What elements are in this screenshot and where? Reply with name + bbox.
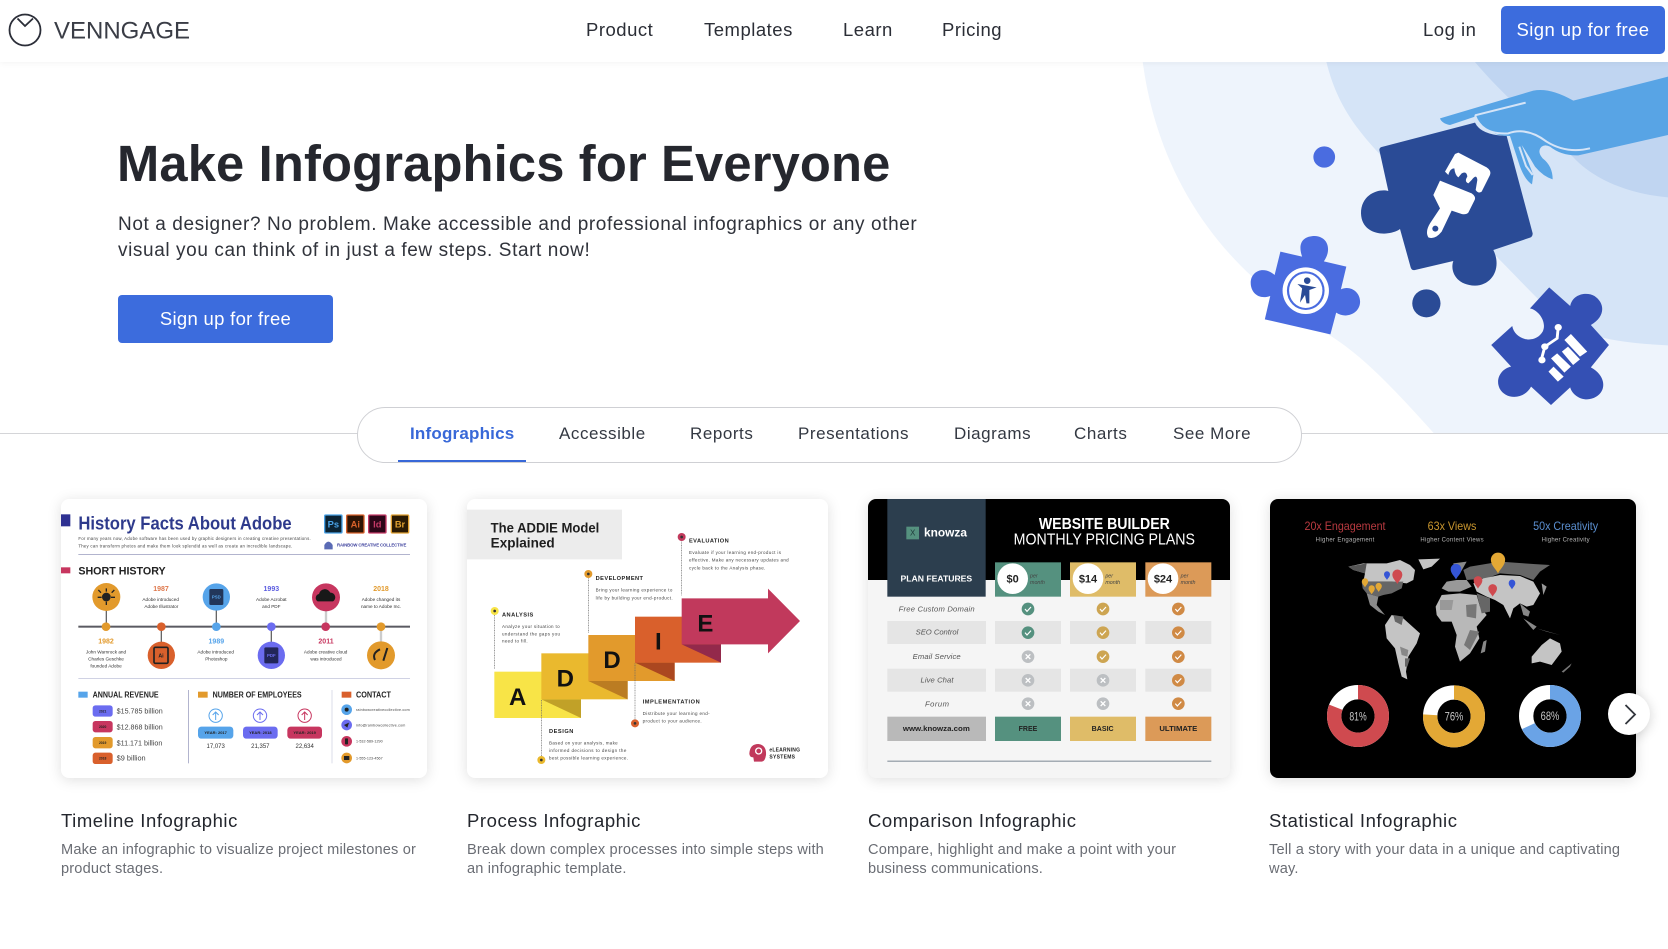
timeline labels: John Warnrock and — [86, 649, 127, 654]
price tags: month — [1030, 580, 1045, 586]
price tags: per — [1029, 574, 1038, 580]
nav link: Templates: Templates — [704, 19, 793, 40]
app icons: Id — [373, 520, 382, 530]
number of employees: 21,357 — [251, 744, 270, 750]
app icons: Ai — [351, 520, 360, 530]
timeline labels: 1989 — [209, 639, 224, 646]
plan footer — [887, 717, 1211, 741]
pricing title — [1014, 516, 1195, 548]
pricing title: WEBSITE BUILDER — [1039, 516, 1170, 533]
app icons: Ps — [328, 520, 339, 530]
tab: Charts: Charts — [1074, 424, 1127, 443]
description: comparison: Compare, highlight and make a point with your — [868, 842, 1176, 858]
tab bar — [357, 407, 1302, 463]
step: analysis: ANALYSIS — [502, 613, 534, 619]
timeline labels: Adobe Acrobat — [256, 597, 287, 602]
carousel next arrow — [1608, 693, 1650, 735]
world map — [1348, 559, 1572, 679]
timeline labels: Adobe introduced — [142, 597, 179, 602]
description: comparison — [868, 842, 1176, 877]
plan footer: FREE — [1019, 724, 1037, 733]
step: evaluation: effective. Make any necessary updates and — [689, 558, 789, 563]
nav link: Pricing: Pricing — [942, 19, 1002, 40]
title box: The ADDIE Model — [491, 520, 599, 535]
annual revenue: ANNUAL REVENUE — [93, 690, 159, 699]
price tags: per — [1104, 574, 1113, 580]
timeline labels — [86, 586, 401, 668]
timeline labels: Adobe creative cloud — [304, 649, 348, 654]
donut chart: 68%: 68% — [1541, 710, 1559, 723]
step: analysis — [491, 607, 560, 669]
icon: hand placing paint brush puzzle piece — [1361, 76, 1668, 286]
description: timeline: product stages. — [61, 861, 163, 877]
step: design: Based on your analysis, make — [549, 740, 618, 745]
step: evaluation: EVALUATION — [689, 539, 729, 545]
step: implementation: product to your audience. — [643, 719, 702, 724]
donut chart: 81% — [1334, 692, 1382, 740]
annual revenue: $9 billion — [117, 754, 146, 763]
hero description: visual you can think of in just a few steps. Start now! — [118, 240, 590, 261]
elearning systems logo: SYSTEMS — [769, 755, 796, 761]
icon: accessibility puzzle piece — [1251, 236, 1360, 334]
number of employees: NUMBER OF EMPLOYEES — [213, 690, 302, 699]
number of employees: 17,073 — [206, 744, 226, 750]
card: statistical infographic thumbnail — [1270, 499, 1636, 778]
timeline: Ai — [158, 654, 164, 660]
timeline labels: 1982 — [98, 639, 114, 646]
feature names: Free Custom Domain — [899, 605, 975, 614]
feature names: Email Service — [913, 652, 961, 661]
step: analysis: Analyze your situation to — [502, 624, 560, 629]
timeline labels: 2011 — [318, 639, 334, 646]
description: timeline: Make an infographic to visualize project milestones or — [61, 842, 416, 858]
icon: blue dot — [1313, 146, 1335, 168]
step: development — [584, 570, 673, 633]
contact — [341, 690, 410, 763]
nav button: sign up — [1501, 6, 1665, 54]
card: comparison infographic thumbnail — [868, 499, 1230, 778]
hero description: Not a designer? No problem. Make accessible and professional infographics or any other — [118, 214, 917, 235]
price tags — [995, 562, 1211, 597]
price tags: month — [1181, 580, 1196, 586]
icon: venngage clock mark — [8, 14, 42, 46]
icon: chevron right — [1624, 704, 1636, 725]
timeline: PDF — [267, 653, 276, 658]
plan footer: BASIC — [1092, 724, 1114, 733]
contact: 1-532-589-1290 — [356, 740, 383, 744]
adobe intro: They can transform photos and make them look splendid as well as create an incredible landscape. — [78, 543, 292, 548]
plan footer: www.knowza.com — [902, 724, 970, 733]
icon: hand — [1440, 77, 1668, 184]
description: statistical: Tell a story with your data in a unique and captivating — [1269, 842, 1620, 858]
donut chart: 81%: 81% — [1349, 711, 1367, 724]
hero description — [118, 214, 917, 261]
app icons — [325, 515, 409, 533]
nav link: Learn: Learn — [843, 19, 893, 40]
timeline labels: 1987 — [153, 586, 169, 593]
description: process: Break down complex processes into simple steps with — [467, 842, 824, 858]
timeline: PSD — [212, 595, 221, 600]
contact: CONTACT — [356, 690, 391, 699]
donut chart: 76% — [1430, 692, 1478, 740]
pricing title: MONTHLY PRICING PLANS — [1014, 531, 1195, 548]
title box — [467, 510, 622, 559]
check and cross marks — [1022, 603, 1185, 710]
step: design: best possible learning experience. — [549, 756, 628, 761]
addie staircase arrow: I — [655, 628, 662, 655]
step: analysis: need to fill. — [502, 639, 528, 644]
price tags: $14 — [1079, 574, 1098, 586]
price tags: $24 — [1154, 574, 1173, 586]
step: implementation: IMPLEMENTATION — [643, 700, 700, 706]
features header: X — [910, 529, 916, 538]
step: implementation: Distribute your learning end- — [643, 711, 710, 716]
number of employees — [198, 690, 322, 750]
nav link: Product: Product — [586, 19, 653, 40]
step: analysis: understand the gaps you — [502, 631, 560, 636]
stat headings: Higher Creativity — [1542, 537, 1590, 543]
hero background and small puzzle illustration — [1143, 62, 1668, 433]
stat headings — [1304, 519, 1598, 543]
addie staircase arrow: A — [509, 684, 526, 711]
logo — [8, 14, 190, 46]
timeline labels: Adobe changed its — [362, 597, 401, 602]
caption: comparison: Comparison Infographic — [868, 810, 1077, 831]
tab: Accessible: Accessible — [559, 424, 646, 443]
nav link: Log in: Log in — [1423, 19, 1476, 40]
step: design: informed decisions to design the — [549, 748, 627, 753]
feature names: Live Chat — [920, 676, 954, 685]
icon: navy dot — [1412, 289, 1441, 317]
table rows — [887, 621, 1211, 692]
adobe intro — [78, 536, 311, 548]
donut chart: 76%: 76% — [1445, 711, 1463, 724]
step: design: DESIGN — [549, 729, 573, 735]
plan footer: ULTIMATE — [1159, 724, 1197, 733]
tab: See More: See More — [1173, 424, 1251, 443]
price tags: month — [1105, 580, 1120, 586]
timeline — [78, 583, 410, 669]
caption: timeline: Timeline Infographic — [61, 810, 238, 831]
map pins — [1362, 553, 1515, 597]
hero title: Make Infographics for Everyone — [117, 135, 890, 192]
elearning systems logo: eLEARNING — [769, 748, 800, 754]
feature names: Forum — [925, 699, 950, 708]
description: comparison: business communications. — [868, 861, 1043, 877]
description: process: an infographic template. — [467, 861, 627, 877]
contact: rainbowcreativecollective.com — [356, 708, 410, 712]
caption: statistical: Statistical Infographic — [1269, 810, 1458, 831]
features header: PLAN FEATURES — [900, 574, 972, 584]
active tab: Infographics: Infographics — [410, 424, 514, 443]
active tab underline — [398, 460, 526, 462]
logo wordmark: VENNGAGE — [54, 18, 190, 44]
number of employees: YEAR: 2017 — [204, 730, 228, 735]
rainbow collective logo: RAINBOW CREATIVE COLLECTIVE — [337, 542, 406, 547]
card: process infographic thumbnail — [467, 499, 828, 778]
description: statistical — [1269, 842, 1620, 877]
nav button: sign up: Sign up for free — [1517, 19, 1649, 40]
annual revenue: $12.868 billion — [117, 722, 163, 731]
annual revenue: 2021 — [99, 709, 107, 713]
price tags: per — [1180, 574, 1189, 580]
icon: chart puzzle piece — [1491, 287, 1609, 405]
step: evaluation — [678, 533, 789, 595]
title box: Explained — [491, 535, 555, 550]
timeline labels: founded Adobe — [90, 663, 122, 668]
caption: process: Process Infographic — [467, 810, 641, 831]
card: timeline infographic thumbnail — [61, 499, 427, 778]
annual revenue: $15.785 billion — [117, 707, 163, 716]
timeline labels: Adobe Illustrator — [144, 604, 179, 609]
step: design — [537, 700, 628, 764]
short history heading: SHORT HISTORY — [78, 565, 166, 577]
rainbow collective logo — [324, 542, 406, 549]
donut chart: 68% — [1526, 692, 1574, 740]
description: process — [467, 842, 824, 877]
timeline labels: Photoshop — [205, 656, 228, 661]
hero button: Sign up for free — [160, 308, 291, 329]
step: development: life by building your end-product. — [596, 595, 673, 600]
contact: info@rainbowcollective.com — [356, 723, 405, 727]
timeline labels: name to Adobe Inc. — [361, 604, 401, 609]
step: development: Bring your learning experience to — [596, 588, 673, 593]
step: implementation — [631, 663, 710, 727]
app icons: Br — [395, 520, 406, 530]
stat headings: Higher Engagement — [1316, 537, 1375, 543]
timeline labels: 1993 — [264, 586, 279, 593]
number of employees: YEAR: 2019 — [293, 730, 317, 735]
annual revenue: $11.171 billion — [117, 738, 162, 747]
number of employees: YEAR: 2018 — [249, 730, 272, 735]
step: development: DEVELOPMENT — [596, 576, 644, 582]
stat headings: 63x Views — [1428, 519, 1476, 533]
addie staircase arrow: E — [697, 610, 713, 637]
timeline labels: and PDF — [262, 604, 281, 609]
addie staircase arrow: D — [603, 647, 621, 674]
timeline labels: 2018 — [373, 586, 389, 593]
timeline labels: Adobe introduced — [197, 649, 234, 654]
feature names — [899, 605, 975, 708]
icon: paint brush puzzle piece — [1361, 123, 1533, 286]
features header: knowza — [924, 525, 967, 539]
annual revenue: 2020 — [99, 725, 107, 729]
addie staircase arrow — [494, 589, 800, 718]
stat headings: 20x Engagement — [1304, 519, 1386, 533]
step: evaluation: Evaluate if your learning end-product is — [689, 550, 782, 555]
addie staircase arrow: D — [557, 665, 574, 692]
elearning systems logo — [749, 744, 800, 762]
annual revenue — [78, 690, 163, 764]
timeline labels: was introduced — [310, 656, 342, 661]
top navigation bar — [0, 0, 1668, 62]
price tags: $0 — [1007, 574, 1019, 586]
description: timeline — [61, 842, 416, 877]
adobe title: History Facts About Adobe — [78, 513, 292, 533]
stat headings: 50x Creativity — [1533, 519, 1598, 533]
description: statistical: way. — [1269, 861, 1299, 877]
hero button — [118, 295, 333, 343]
features header — [887, 499, 986, 597]
annual revenue: 2018 — [99, 757, 107, 761]
tab: Diagrams: Diagrams — [954, 424, 1031, 443]
tab: Presentations: Presentations — [798, 424, 909, 443]
timeline labels: Charles Geschke — [88, 656, 124, 661]
feature names: SEO Control — [916, 628, 959, 637]
adobe intro: For many years now, Adobe software has been used by graphic designers in creating creative presentations. — [78, 536, 311, 541]
number of employees: 22,634 — [295, 744, 315, 750]
annual revenue: 2019 — [99, 741, 107, 745]
contact: 1-555-123-4567 — [356, 756, 383, 760]
step: evaluation: cycle back to the Analysis phase. — [689, 565, 765, 570]
tab: Reports: Reports — [690, 424, 753, 443]
stat headings: Higher Content Views — [1420, 537, 1484, 543]
